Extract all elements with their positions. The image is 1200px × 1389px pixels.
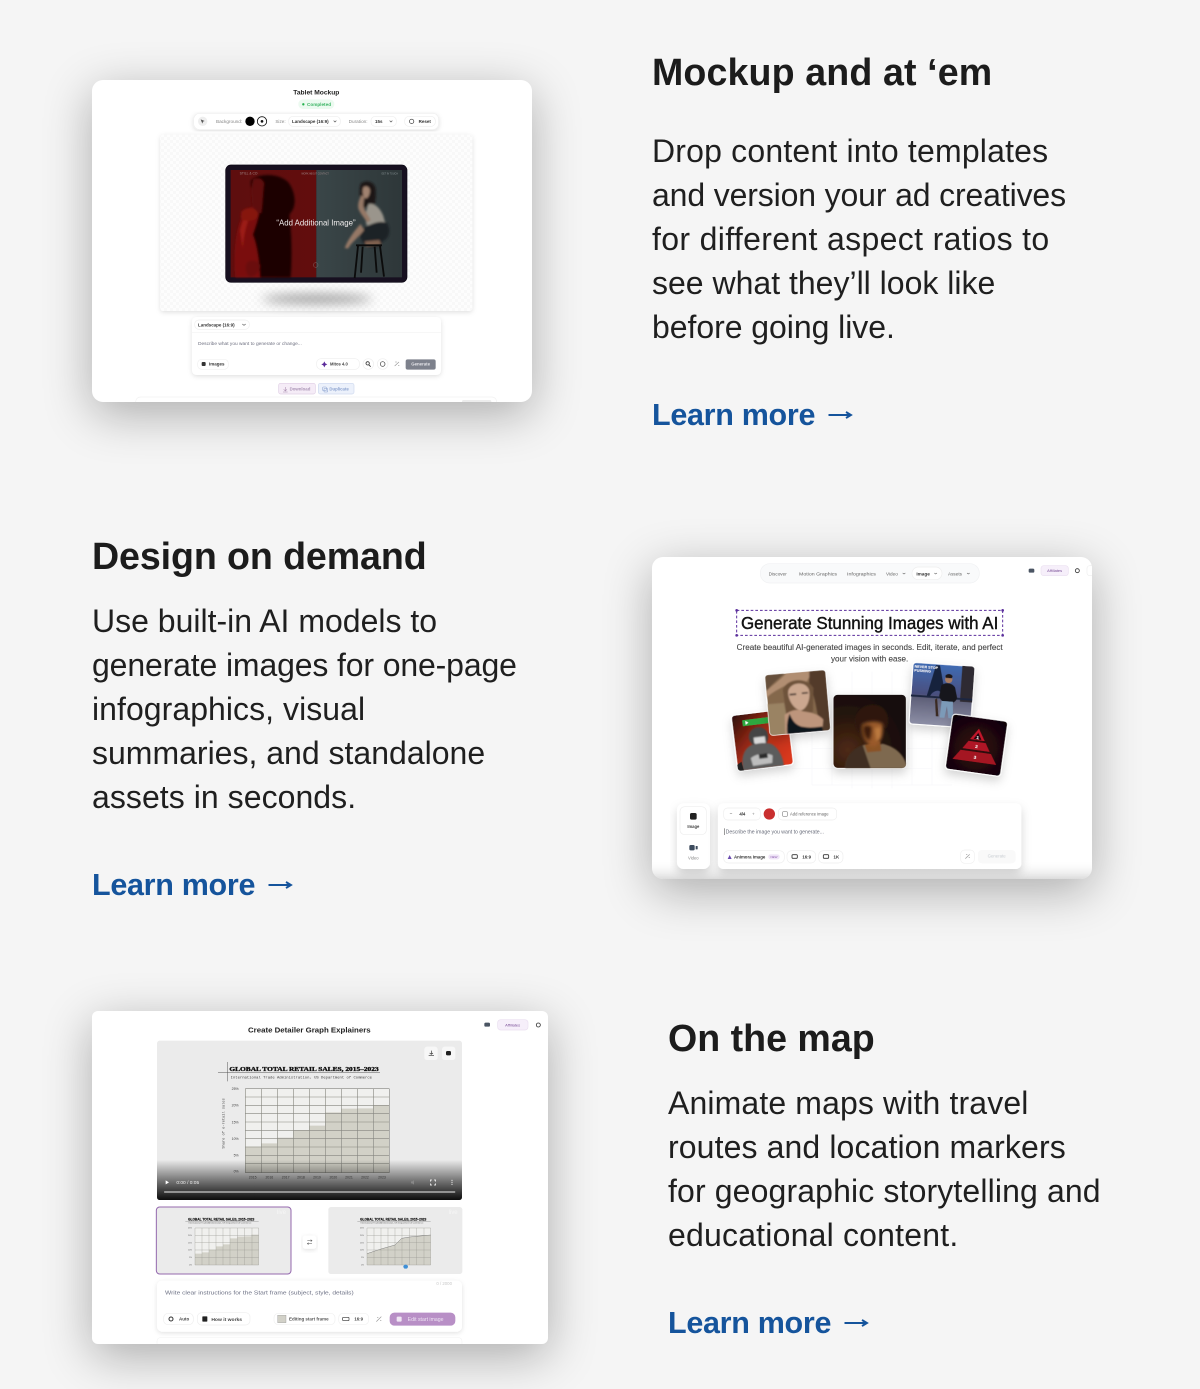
toolbar: Reset — [419, 119, 431, 124]
text: mockup description: before going live. — [652, 309, 895, 345]
start frame thumbnail: 5% — [189, 1257, 192, 1259]
download button — [279, 383, 315, 394]
prompt composer — [718, 803, 1021, 869]
prompt panel: Generate — [411, 362, 431, 367]
start frame thumbnail: 0% — [189, 1264, 192, 1266]
image: woman portrait — [765, 670, 831, 736]
text: mockup description: see what they’ll look like — [652, 265, 995, 301]
text: map description: educational content. — [668, 1217, 958, 1253]
text: design description — [92, 603, 517, 815]
duplicate button: Duplicate — [329, 386, 349, 391]
image: red pyramid chart — [945, 714, 1008, 777]
bar chart: 0% — [234, 1170, 239, 1174]
start frame thumbnail: GLOBAL TOTAL RETAIL SALES, 2015–2023 — [188, 1218, 255, 1222]
end frame thumbnail: International Trade Administration, US Department of Commerce — [361, 1221, 424, 1224]
bar chart: International Trade Administration, US Department of Commerce — [231, 1075, 372, 1080]
headline with dashed selection: Generate Stunning Images with AI — [741, 613, 998, 633]
status pill: Completed — [307, 102, 331, 107]
screenshot: image generator — [652, 557, 1092, 879]
video player — [157, 1041, 462, 1200]
end frame thumbnail: 25% — [360, 1228, 364, 1230]
header actions: Affiliates — [1047, 568, 1062, 573]
prompt panel: Landscape (16:9) — [198, 322, 235, 327]
start frame thumbnail: 20% — [188, 1235, 192, 1237]
canvas panel — [160, 135, 472, 311]
prompt composer: 1K — [834, 855, 840, 860]
prompt panel: How it works — [211, 1317, 242, 1323]
prompt panel: Write clear instructions for the Start frame (subject, style, details) — [165, 1290, 354, 1296]
heading: On the map: On the map — [668, 1017, 875, 1059]
toolbar — [194, 113, 439, 130]
end frame thumbnail: 5% — [361, 1257, 364, 1259]
nav bar — [760, 564, 979, 583]
subheading: Create beautiful AI-generated images in seconds. Edit, iterate, and perfect — [737, 643, 1003, 652]
toolbar: Background: — [216, 119, 242, 124]
prompt panel: Editing start frame — [289, 1317, 329, 1322]
end frame thumbnail — [328, 1207, 462, 1274]
prompt composer: Add reference image — [790, 812, 829, 817]
chart years: 2021 — [345, 1175, 353, 1179]
tablet shadow — [262, 294, 372, 304]
video buttons — [424, 1047, 455, 1060]
header actions — [484, 1020, 540, 1030]
prompt panel — [157, 1281, 462, 1332]
text: design description: infographics, visual — [92, 691, 365, 727]
nav bar: Video — [886, 571, 898, 576]
prompt composer: + — [752, 812, 755, 817]
status pill — [298, 99, 334, 109]
end frame thumbnail: GLOBAL TOTAL RETAIL SALES, 2015–2023 — [360, 1218, 427, 1222]
nav bar: Motion Graphics — [799, 571, 838, 576]
text: mockup description: Drop content into templates — [652, 133, 1048, 169]
lower panel edge — [136, 397, 497, 417]
prompt panel: 0 / 2000 — [436, 1281, 453, 1286]
bar chart: 10% — [232, 1137, 239, 1141]
bar chart: Share of e-retail sales — [221, 1098, 226, 1149]
prompt composer: − — [730, 812, 733, 817]
mode switcher: Image — [687, 824, 700, 829]
bar chart: 5% — [234, 1154, 239, 1158]
tablet overlay label: “Add Additional Image” — [276, 219, 356, 228]
heading: Mockup and at 'em: Mockup and at ‘em — [652, 51, 992, 93]
image: man at eiffel tower — [909, 662, 975, 728]
screenshot: graph explainer — [92, 1011, 548, 1344]
right seated figure — [345, 181, 389, 249]
header actions: Affiliates — [505, 1022, 520, 1027]
faint grid behind images — [792, 672, 952, 788]
start frame thumbnail: 10% — [188, 1250, 192, 1252]
text: design description: generate images for one-page — [92, 647, 517, 683]
start frame thumbnail: live — [277, 1210, 287, 1216]
prompt panel: Mitos 4.0 — [330, 362, 348, 367]
left portrait — [234, 175, 295, 277]
text: design description: Use built-in AI models to — [92, 603, 437, 639]
header actions — [1029, 566, 1097, 576]
bottom fade — [652, 860, 1092, 880]
end frame thumbnail: 10% — [360, 1250, 364, 1252]
nav bar: Image — [916, 571, 930, 576]
nav bar: Assets — [948, 571, 963, 576]
nav bar: Discover — [769, 571, 787, 576]
end frame thumbnail: 20% — [360, 1235, 364, 1237]
end frame thumbnail: 15% — [360, 1242, 364, 1244]
text: map description: routes and location markers — [668, 1129, 1066, 1165]
start frame thumbnail: International Trade Administration, US Department of Commerce — [189, 1221, 252, 1224]
link: learn more: Learn more — [92, 868, 255, 902]
chart years — [249, 1175, 386, 1179]
prompt panel: Edit start image — [408, 1317, 444, 1323]
bar chart: GLOBAL TOTAL RETAIL SALES, 2015–2023 — [229, 1066, 380, 1073]
prompt panel — [192, 317, 441, 375]
chart years: 2018 — [297, 1175, 305, 1179]
prompt panel: Describe what you want to generate or change... — [198, 341, 302, 347]
chart years: 2015 — [249, 1175, 257, 1179]
link: learn more: Learn more — [668, 1306, 831, 1340]
image: red pyramid chart: 2 — [975, 744, 979, 749]
text: design description: summaries, and standalone — [92, 735, 485, 771]
chart years: 2020 — [329, 1175, 337, 1179]
text: mockup description: for different aspect ratios to — [652, 221, 1050, 257]
swap button — [303, 1236, 316, 1249]
prompt composer: NEW — [771, 855, 778, 859]
lower panel edge — [157, 1337, 462, 1347]
prompt panel: Auto — [179, 1317, 189, 1322]
title: Tablet Mockup — [293, 89, 339, 96]
image: gamer illustration — [731, 709, 794, 771]
bar chart — [218, 1062, 389, 1174]
toolbar: Duration: — [349, 119, 368, 124]
chart years: 2023 — [378, 1175, 386, 1179]
playback controls — [164, 1180, 455, 1193]
image: red pyramid chart: 3 — [973, 755, 977, 760]
prompt composer: 4/4 — [739, 812, 746, 817]
start frame thumbnail — [156, 1207, 291, 1274]
chart years: 2017 — [282, 1175, 290, 1179]
prompt composer: 16:9 — [802, 855, 812, 860]
end frame thumbnail: 0% — [361, 1264, 364, 1266]
image: man at eiffel tower: PUSHING — [914, 669, 931, 674]
image: man at eiffel tower: NEVER STOP — [914, 665, 939, 670]
text: design description: assets in seconds. — [92, 779, 356, 815]
title: Create Detailer Graph Explainers — [248, 1025, 371, 1034]
chart years: 2019 — [313, 1175, 321, 1179]
chart years: 2022 — [361, 1175, 369, 1179]
prompt composer: Describe the image you want to generate... — [726, 829, 824, 835]
start frame thumbnail: 25% — [188, 1228, 192, 1230]
screenshot: tablet mockup editor — [92, 80, 532, 402]
bar chart: 15% — [232, 1120, 239, 1124]
bar chart: 25% — [232, 1087, 239, 1091]
text: map description — [668, 1085, 1101, 1253]
end frame thumbnail: live — [449, 1210, 458, 1216]
text: map description: Animate maps with travel — [668, 1085, 1028, 1121]
link: learn more: Learn more — [652, 398, 815, 432]
heading: Design on demand: Design on demand — [92, 535, 427, 577]
mode switcher — [677, 803, 710, 869]
toolbar: Landscape (16:9) — [292, 119, 329, 124]
start frame thumbnail: 15% — [188, 1242, 192, 1244]
prompt panel: Images — [209, 362, 225, 367]
prompt composer: Generate — [988, 854, 1006, 859]
chart years: 2016 — [265, 1175, 273, 1179]
duplicate button — [318, 383, 354, 394]
subheading — [737, 643, 1003, 663]
mode switcher: Video — [688, 855, 699, 860]
bar chart: 20% — [232, 1104, 239, 1108]
tablet: WORK ABOUT CONTACT — [301, 172, 329, 175]
toolbar: 15s — [375, 119, 383, 124]
prompt panel: 16:9 — [354, 1317, 364, 1322]
image: man in warm light — [833, 694, 907, 768]
text: mockup description: and version your ad creatives — [652, 177, 1066, 213]
nav bar: Infographics — [847, 571, 877, 576]
tablet: GET IN TOUCH — [381, 173, 398, 175]
download button: Download — [290, 386, 311, 391]
playback controls: 0:00 / 0:05 — [176, 1180, 199, 1186]
tablet — [226, 165, 407, 282]
text: map description: for geographic storytelling and — [668, 1173, 1101, 1209]
tablet: STILL & CO — [240, 171, 258, 175]
prompt composer: Animora Image — [734, 855, 766, 860]
text: mockup description — [652, 133, 1066, 345]
subheading: your vision with ease. — [831, 654, 908, 663]
toolbar: Size: — [275, 119, 286, 124]
image: red pyramid chart: 1 — [976, 735, 980, 741]
